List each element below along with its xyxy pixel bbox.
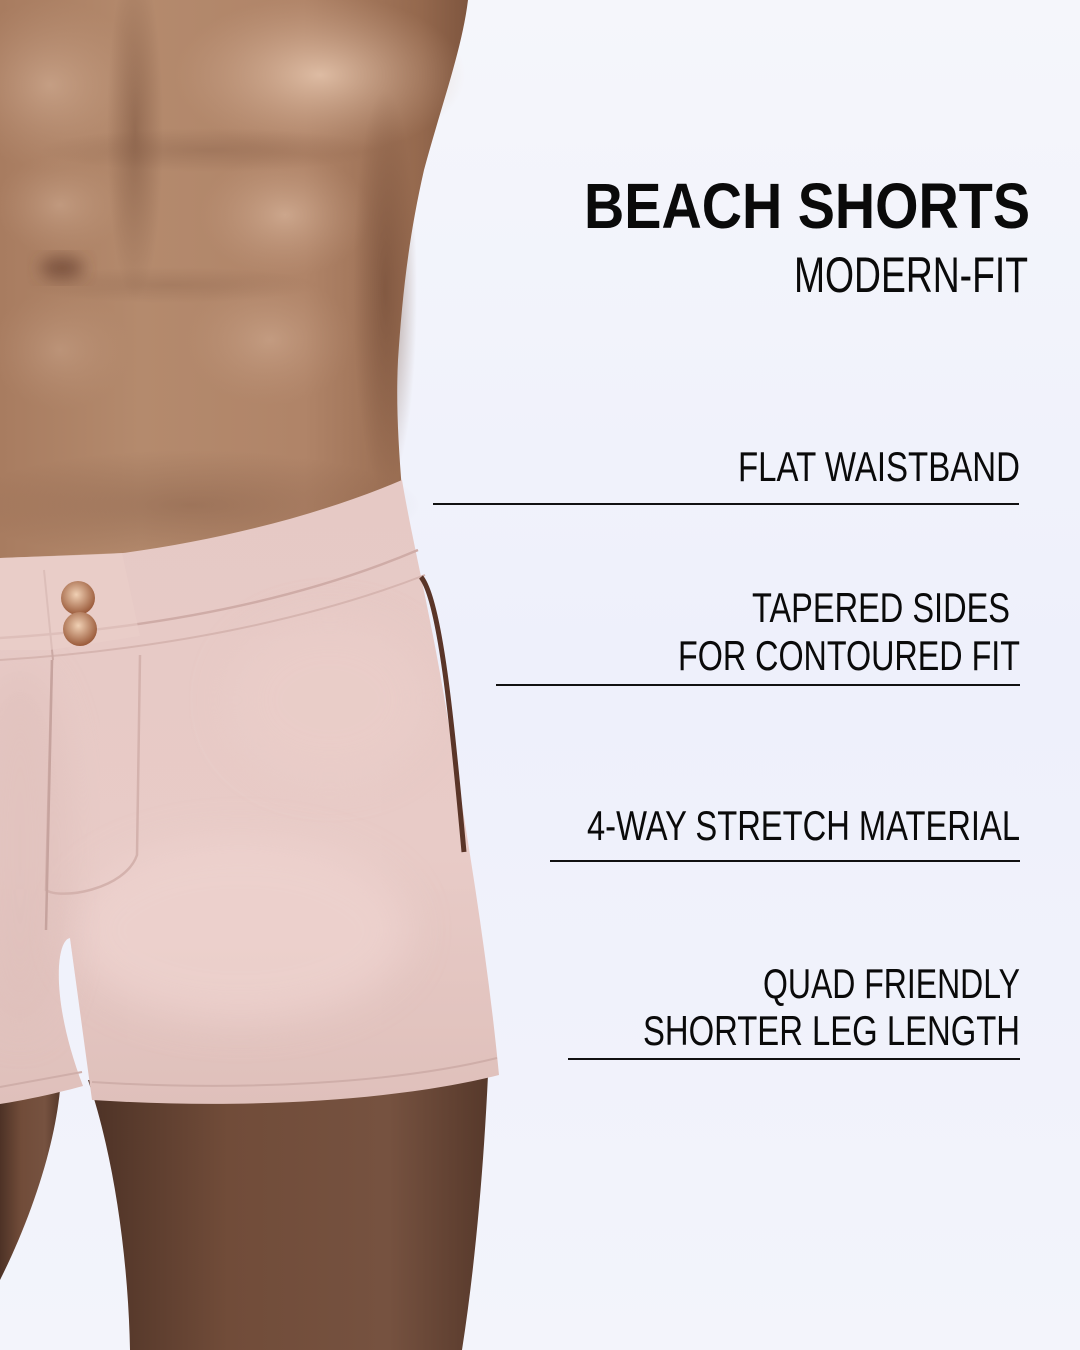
- fly placket: [46, 655, 140, 894]
- left leg: [0, 1090, 60, 1280]
- feature: tapered sides: TAPERED SIDES: [752, 584, 1010, 631]
- waistband tab: [0, 553, 140, 650]
- photo illustration: torso and beach shorts: [0, 0, 499, 1350]
- right leg: [88, 1075, 488, 1350]
- zipper pocket: [421, 577, 464, 852]
- rose gold snap buttons: [61, 581, 97, 646]
- torso: [0, 0, 468, 620]
- hem stitch: [92, 1058, 497, 1086]
- feature: tapered sides: [496, 584, 1020, 686]
- beach shorts: [0, 480, 499, 1104]
- feature: quad friendly: [568, 960, 1020, 1060]
